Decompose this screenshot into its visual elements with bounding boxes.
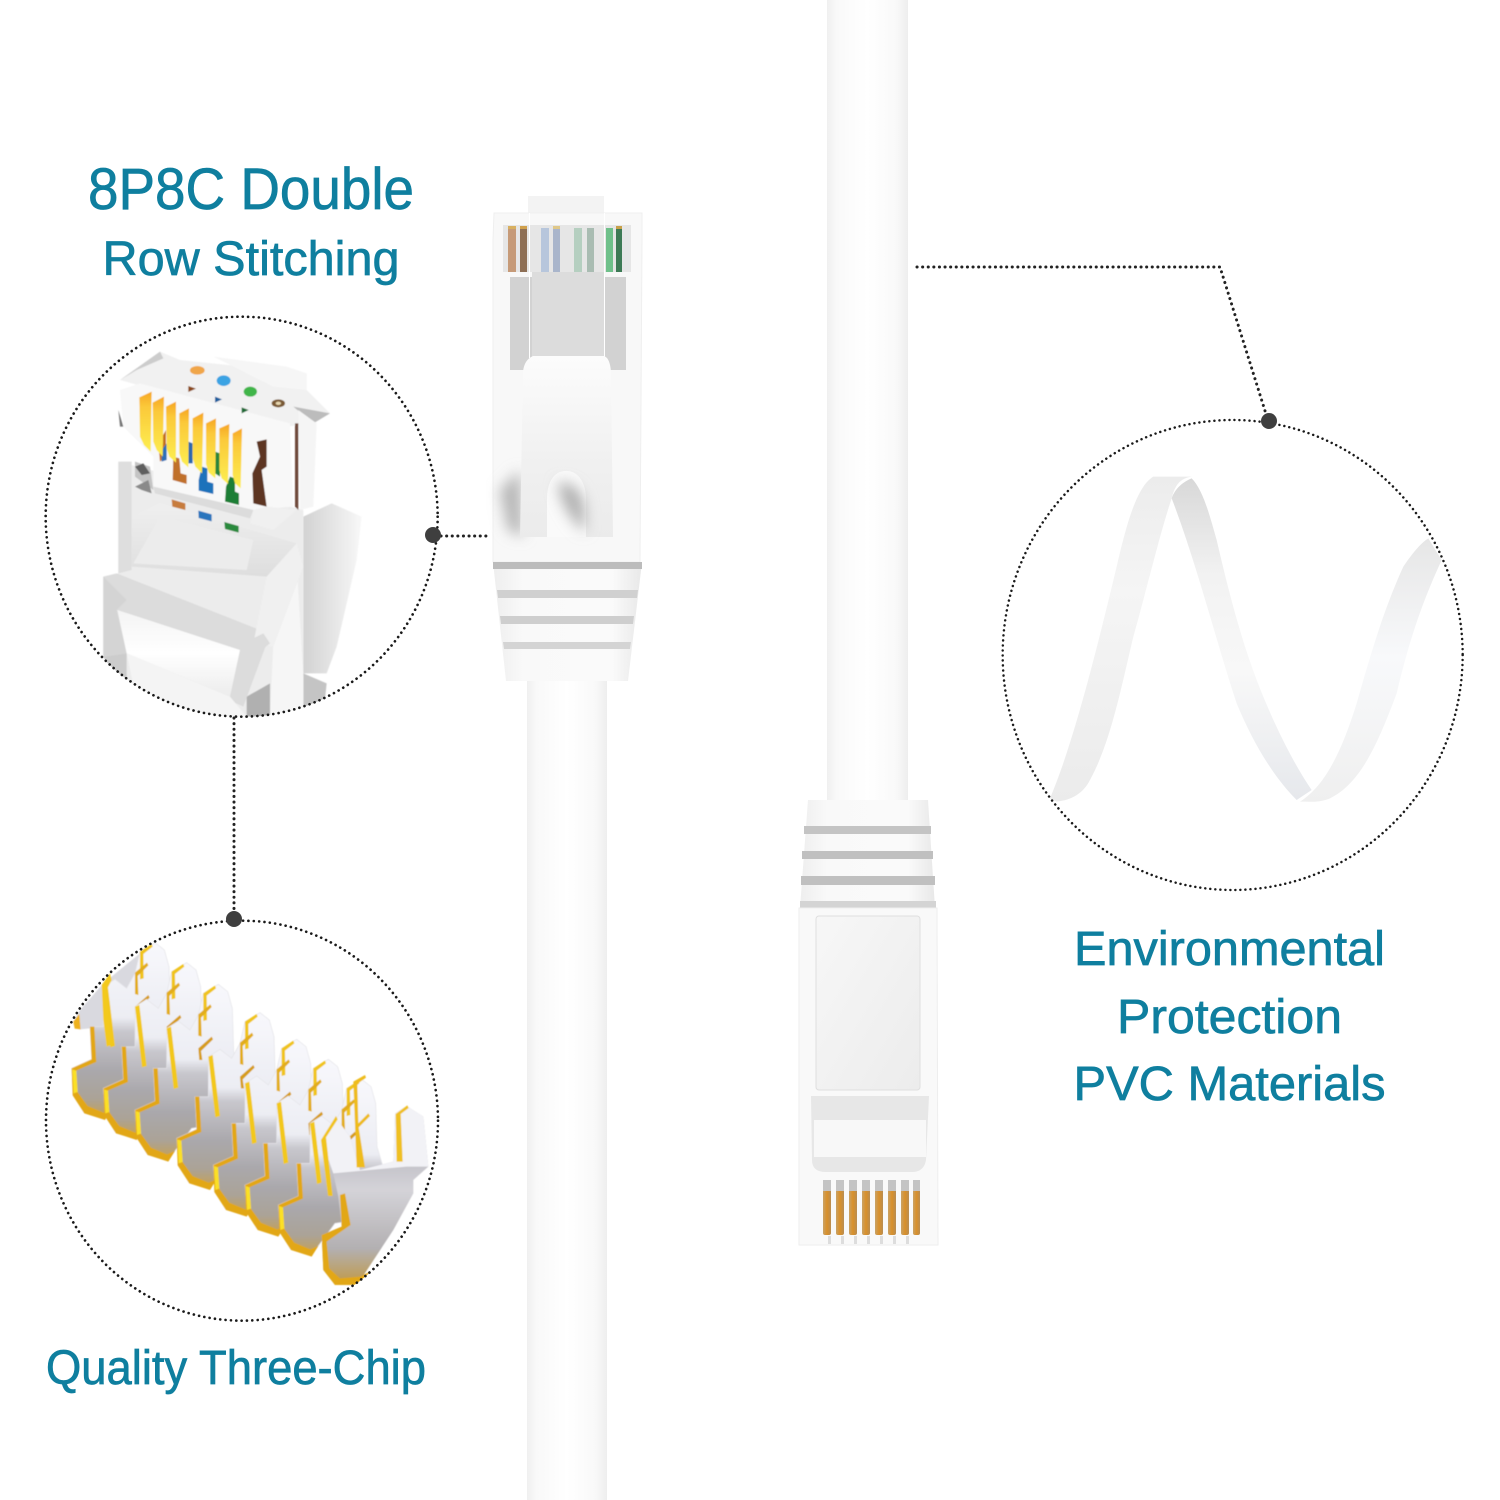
heading: Environmental Protection PVC Materials <box>1074 923 1386 1111</box>
flat white ribbon cable <box>1050 477 1442 802</box>
plug body <box>493 213 642 562</box>
plug body <box>799 908 938 1245</box>
white cable on the left <box>527 675 607 1500</box>
heading: Environmental Protection PVC Materials: PVC Materials <box>1074 1058 1386 1111</box>
heading: 8P8C Double Row Stitching <box>88 157 414 286</box>
shadow beneath latch <box>500 470 523 537</box>
connector: left cable plug, latch side up <box>493 196 642 681</box>
leader line: left plug to cutaway circle <box>425 527 489 543</box>
plug boot <box>800 800 936 908</box>
detail circle: flat cable ribbon <box>1003 420 1463 890</box>
plug top tab <box>528 196 604 226</box>
plug latch <box>811 1096 929 1172</box>
leader line: right cable to ribbon circle <box>917 267 1277 429</box>
cutaway illustration <box>103 352 362 717</box>
heading: Environmental Protection PVC Materials: Environmental <box>1074 923 1385 976</box>
contact window with wires <box>503 225 631 272</box>
heading: Quality Three-Chip: Quality Three-Chip <box>46 1342 426 1395</box>
leader line: cutaway circle to contacts circle <box>226 718 242 927</box>
heading: Environmental Protection PVC Materials: Protection <box>1117 991 1342 1044</box>
white cable on the right <box>827 0 908 805</box>
dotted circle outline <box>1003 420 1463 890</box>
plug label panel <box>816 916 920 1090</box>
latch slot shading <box>547 471 586 537</box>
plug boot with strain-relief ribs <box>493 562 642 681</box>
detail circle: three-chip gold contacts <box>46 921 438 1321</box>
front contact blade <box>323 1126 428 1285</box>
heading: 8P8C Double Row Stitching: Row Stitching <box>102 233 400 286</box>
gold contact pins <box>823 1180 920 1244</box>
grey recess under the window <box>510 277 626 370</box>
dotted circle outline <box>46 317 438 717</box>
gold contact blades <box>72 943 428 1285</box>
dotted circle outline <box>46 921 438 1321</box>
latch clip <box>520 356 613 537</box>
heading: 8P8C Double Row Stitching: 8P8C Double <box>88 157 414 222</box>
connector: right cable plug, contacts down <box>799 800 938 1245</box>
detail circle: connector cutaway <box>46 317 438 717</box>
